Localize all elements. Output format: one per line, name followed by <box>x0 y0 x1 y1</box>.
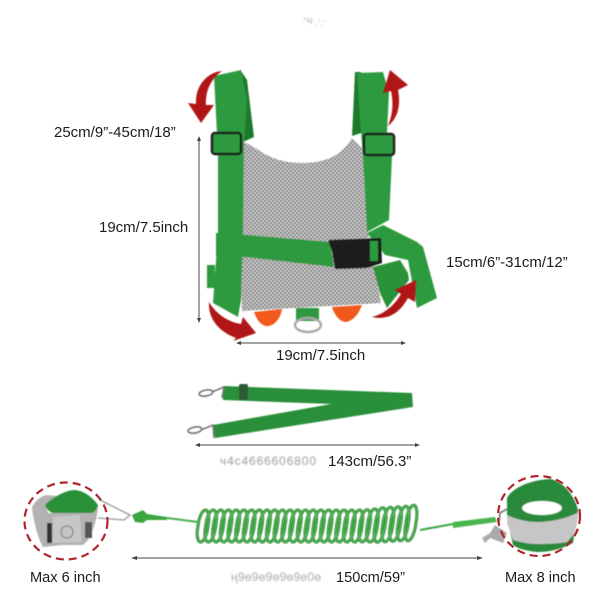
spring coil <box>197 505 417 542</box>
buckle slots <box>47 522 92 543</box>
strap slider <box>239 384 248 400</box>
coiled leash <box>132 505 497 542</box>
right slider buckle <box>364 134 394 155</box>
waist belt <box>216 233 334 267</box>
left strap <box>213 70 247 317</box>
back straps <box>241 71 364 142</box>
cuff green lining <box>45 490 98 513</box>
arrow: bottom right <box>372 280 416 318</box>
right strap <box>357 72 392 232</box>
garbled faded label: ң9ө9ө9ө9ө9ө0ө <box>231 570 321 584</box>
dimension arrow: vest width <box>236 341 406 345</box>
dimension arrow: leash length <box>131 556 483 560</box>
faint watermark at top: °Ҹ ˎ⸱ˎ⸱ <box>303 16 326 26</box>
mesh back panel <box>240 138 381 311</box>
right cuff with dashed circle <box>482 476 580 556</box>
label: small cuff: Max 6 inch <box>30 570 101 586</box>
right side straps <box>367 225 437 308</box>
label: strap total length: 143cm/56.3” <box>328 453 411 470</box>
bottom strap arm <box>213 403 413 438</box>
garbled faded label: ч4с4666606800 <box>220 454 316 468</box>
bottom hook <box>188 425 214 438</box>
left slider buckle <box>212 133 241 154</box>
cuff outer green <box>507 479 578 552</box>
shoulder connector strap <box>188 384 413 438</box>
label: waist: 15cm/6”-31cm/12” <box>446 254 568 271</box>
dashed circle right <box>498 476 580 556</box>
bottom D-ring <box>295 308 321 332</box>
dimension arrow: vest height <box>197 136 201 323</box>
left cuff with dashed circle <box>24 482 130 560</box>
left side tab <box>207 265 215 288</box>
arrow: top right <box>383 70 408 126</box>
dashed circle left <box>24 482 108 560</box>
orange tabs <box>254 305 362 326</box>
label: vest height: 19cm/7.5inch <box>99 219 188 236</box>
carabiner wires <box>98 500 130 520</box>
label: strap length: 25cm/9”-45cm/18” <box>54 124 176 141</box>
cuff grey body <box>32 495 98 547</box>
arrow: bottom left <box>209 302 256 341</box>
label: leash length: 150cm/59” <box>336 570 405 586</box>
right connector tube <box>420 517 497 530</box>
metal clip and tag <box>482 509 507 543</box>
belt buckle <box>328 238 382 269</box>
arrow: top left <box>188 71 222 123</box>
dimension arrow: strap length <box>195 443 420 447</box>
cuff grey band <box>507 512 579 544</box>
top strap arm <box>223 386 413 407</box>
cuff opening <box>522 501 562 515</box>
buckle button <box>61 526 73 538</box>
label: large cuff: Max 8 inch <box>505 570 576 586</box>
vest harness <box>207 70 437 332</box>
curved adjustment arrows <box>188 70 416 341</box>
left connector tube <box>132 510 198 523</box>
top hook <box>199 387 224 398</box>
label: vest width: 19cm/7.5inch <box>276 347 365 364</box>
buckle face <box>53 515 82 543</box>
